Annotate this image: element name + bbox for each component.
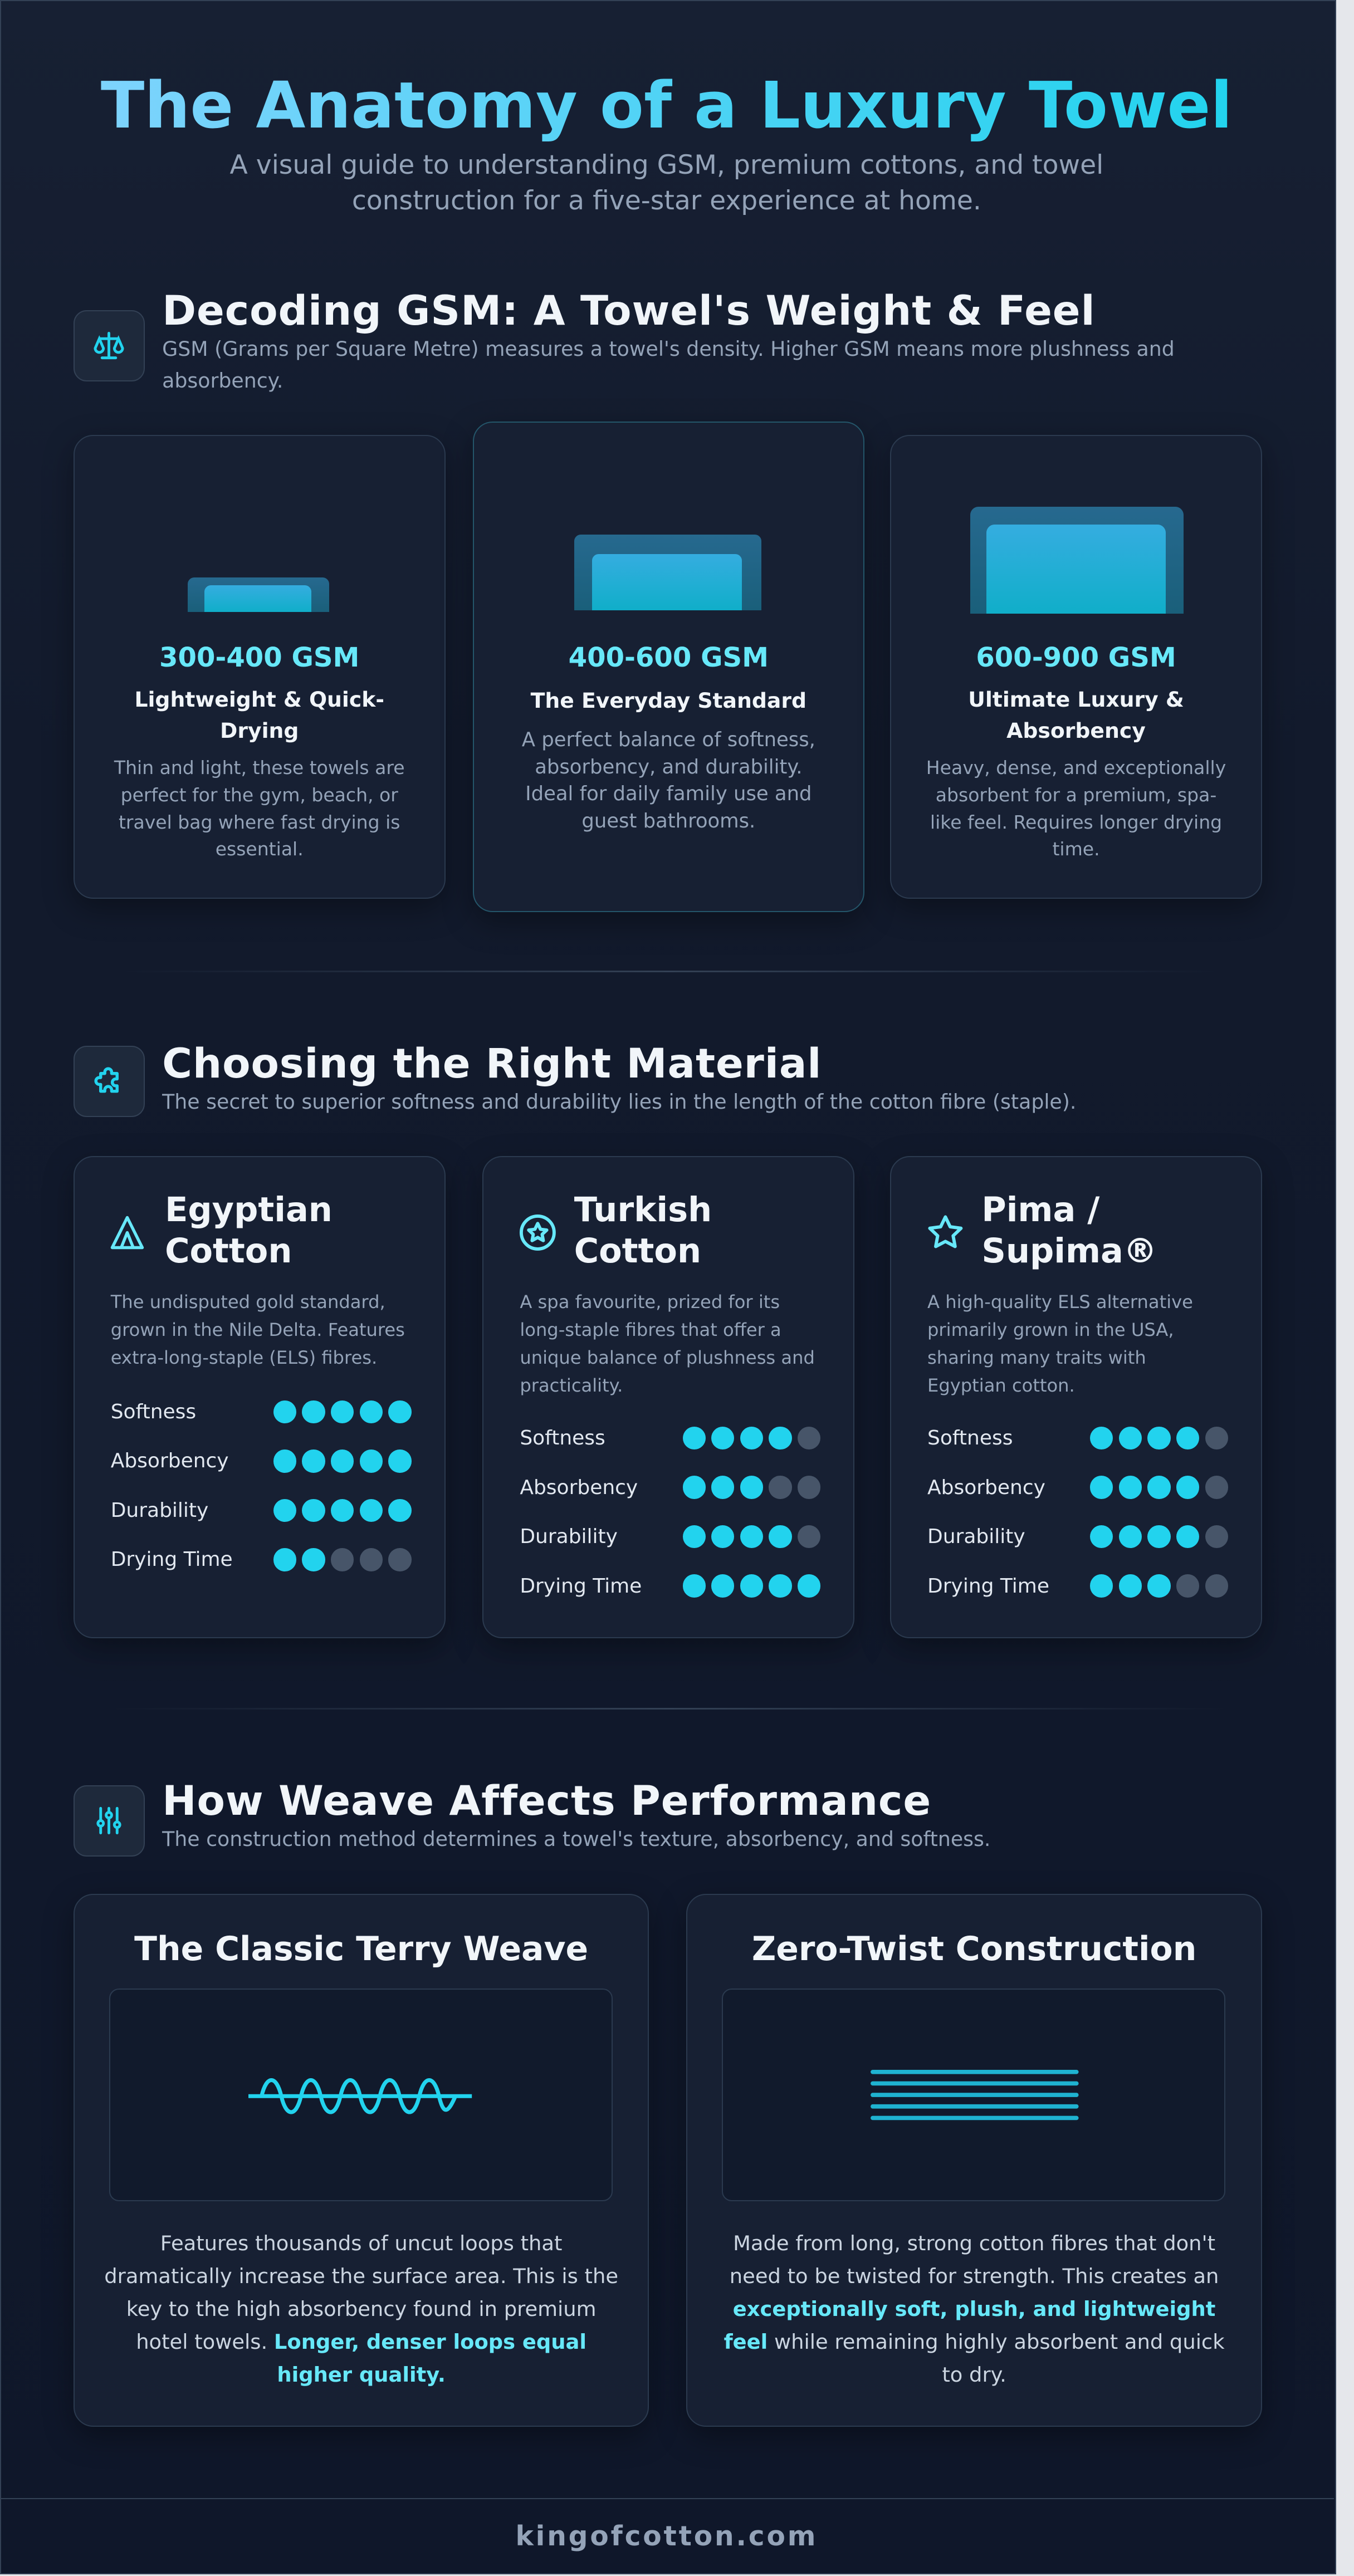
- panel: terry weave: [74, 1894, 649, 2427]
- panel: terry weave: The Classic Terry Weave: [134, 1929, 588, 1968]
- panel: Egyptian cotton: Egyptian: [165, 1191, 333, 1230]
- icon: star badge: [519, 1214, 556, 1251]
- section description: GSM: GSM (Grams per Square Metre) measures a towel's density. Higher GSM means more plushness and absorbency.: [162, 337, 1175, 392]
- subtitle: A visual guide to understanding GSM, premium cottons, and towel construction for a five-star experience at home.: [229, 150, 1103, 216]
- ratings: Durability: [927, 1525, 1025, 1548]
- title: The Anatomy of a Luxury Towel: [101, 68, 1233, 143]
- ratings: Durability: [520, 1525, 618, 1548]
- ratings: Drying Time: [927, 1575, 1049, 1598]
- ratings: Softness: [927, 1427, 1013, 1449]
- panel: Turkish cotton: A spa favourite, prized for its long-staple fibres that offer a unique balance of plushness and practicality.: [520, 1291, 815, 1396]
- ratings: Drying Time: [111, 1548, 233, 1571]
- panel: 600-900 GSM: Ultimate Luxury & Absorbency: [968, 687, 1184, 743]
- panel: zero-twist: [686, 1894, 1262, 2427]
- panel: 400-600 GSM: 400-600 GSM: [569, 642, 769, 673]
- panel: zero-twist: Made from long, strong cotton fibres that don't need to be twisted for strength. This creates an exceptionally soft, plush, and lightweight feel while remaining highly absorbent and quick to dry.: [724, 2231, 1225, 2387]
- panel: Turkish cotton: Turkish: [574, 1191, 712, 1230]
- panel: 300-400 GSM: Thin and light, these towels are perfect for the gym, beach, or travel bag where fast drying is essential.: [114, 757, 405, 860]
- panel: Turkish cotton: [482, 1156, 854, 1638]
- icon: star: [928, 1215, 962, 1248]
- icon: thick towel: [970, 507, 1184, 614]
- section description: material: The secret to superior softness and durability lies in the length of the cotton fibre (staple).: [162, 1090, 1076, 1114]
- icon: pyramid: [110, 1216, 144, 1250]
- ratings: Absorbency: [927, 1476, 1045, 1499]
- panel: 300-400 GSM: 300-400 GSM: [159, 642, 359, 673]
- ratings: Durability: [111, 1499, 208, 1522]
- ratings: [520, 1427, 820, 1598]
- heading: decoding GSM: Decoding GSM: A Towel's Weight & Feel: [162, 287, 1096, 335]
- icon: thin towel: [188, 577, 329, 612]
- panel: 600-900 GSM: Heavy, dense, and exceptionally absorbent for a premium, spa-like feel. Requires longer drying time.: [926, 757, 1226, 860]
- ratings: [111, 1400, 412, 1571]
- panel: Turkish cotton: Cotton: [574, 1232, 701, 1271]
- icon: medium towel: [574, 535, 761, 610]
- panel: Pima cotton: Pima /: [981, 1191, 1099, 1230]
- panel: 300-400 GSM: Lightweight & Quick-Drying: [134, 687, 384, 743]
- icon: sliders: [74, 1785, 145, 1857]
- panel: 400-600 GSM: The Everyday Standard: [531, 688, 806, 713]
- panel: Pima cotton: [890, 1156, 1262, 1638]
- panel: Pima cotton: A high-quality ELS alternative primarily grown in the USA, sharing many traits with Egyptian cotton.: [927, 1291, 1193, 1396]
- ratings: Softness: [111, 1400, 196, 1423]
- section description: weave: The construction method determines a towel's texture, absorbency, and softness.: [162, 1827, 990, 1851]
- ratings: Absorbency: [111, 1449, 229, 1472]
- icon: puzzle: [74, 1046, 145, 1117]
- ratings: [927, 1427, 1228, 1598]
- panel: 400-600 GSM: A perfect balance of softness, absorbency, and durability. Ideal for daily family use and guest bathrooms.: [522, 728, 815, 832]
- panel: Pima cotton: Supima®: [981, 1232, 1157, 1271]
- panel: Egyptian cotton: [74, 1156, 446, 1638]
- panel: Egyptian cotton: Cotton: [165, 1232, 292, 1271]
- ratings: Softness: [520, 1427, 605, 1449]
- footer: kingofcotton.com: [515, 2521, 818, 2552]
- panel: terry weave: Features thousands of uncut loops that dramatically increase the surface area. This is the key to the high absorbency found in premium hotel towels. Longer, denser loops equal higher quality.: [104, 2231, 618, 2387]
- panel: 400-600 GSM: [473, 422, 864, 912]
- heading: material: Choosing the Right Material: [162, 1040, 822, 1088]
- illustration: straight fibres: [722, 1989, 1225, 2201]
- footer: [0, 2498, 1334, 2575]
- illustration: terry loops: [109, 1989, 613, 2201]
- ratings: Absorbency: [520, 1476, 638, 1499]
- heading: weave: How Weave Affects Performance: [162, 1777, 931, 1825]
- icon: scales: [74, 310, 145, 381]
- panel: 600-900 GSM: 600-900 GSM: [976, 642, 1176, 673]
- panel: 300-400 GSM: [74, 435, 446, 899]
- panel: Egyptian cotton: The undisputed gold standard, grown in the Nile Delta. Features extra-long-staple (ELS) fibres.: [111, 1291, 405, 1368]
- panel: zero-twist: Zero-Twist Construction: [752, 1929, 1196, 1968]
- panel: 600-900 GSM: [890, 435, 1262, 899]
- ratings: Drying Time: [520, 1575, 642, 1598]
